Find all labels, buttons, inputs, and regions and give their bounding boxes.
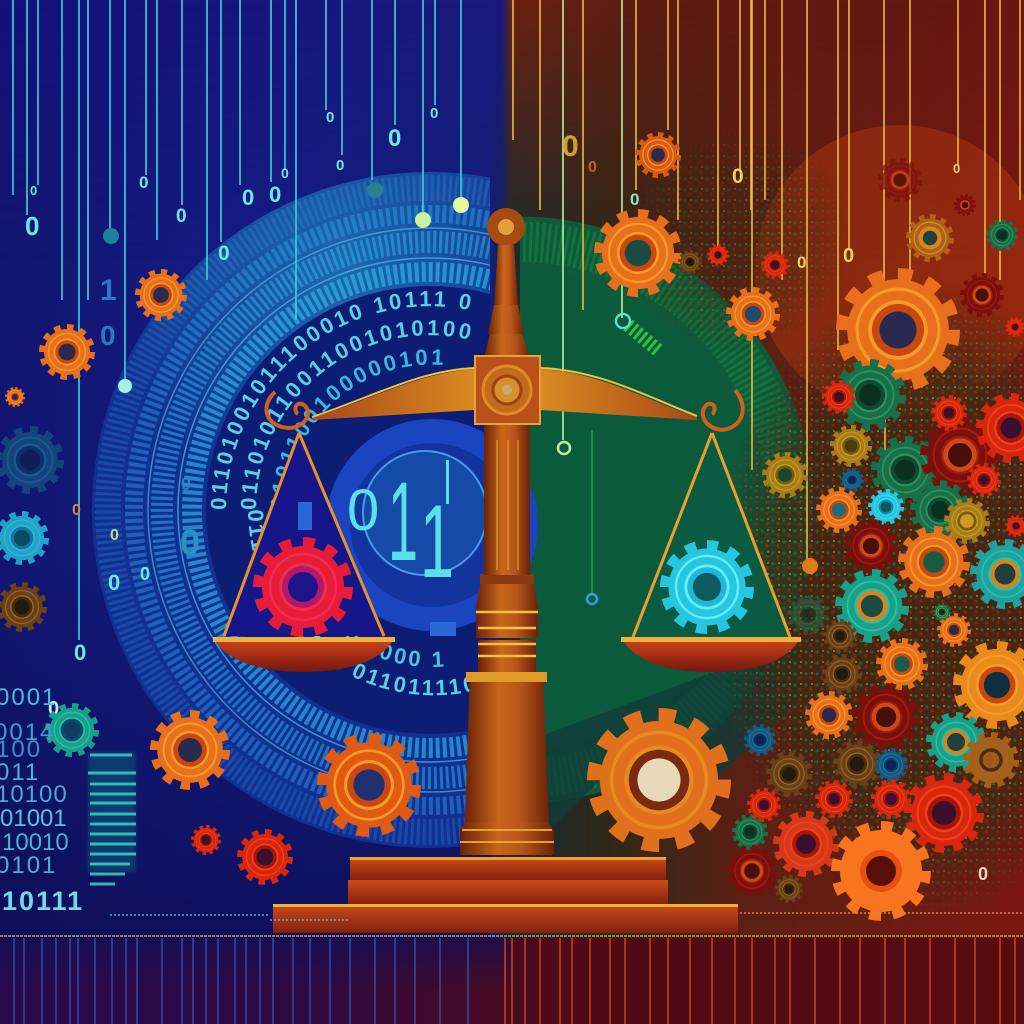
- binary ring text: 10100101100 0000 1: [346, 636, 444, 667]
- falling code lines: blue side: [13, 0, 469, 640]
- scale: left pan: [213, 637, 395, 672]
- falling zeros: blue side: 0: [139, 173, 148, 192]
- falling code lines: orange side: [513, 0, 1020, 604]
- falling zeros: blue side: 0: [140, 564, 150, 584]
- falling zeros: orange side: [562, 130, 988, 884]
- scale: left triangle: [224, 433, 384, 636]
- falling zeros: orange side: 0: [877, 295, 888, 317]
- falling zeros: blue side: 0: [48, 698, 59, 720]
- falling zeros: blue side: 0: [242, 185, 254, 210]
- falling zeros: blue side: 0: [181, 474, 191, 494]
- scale: right triangle: [633, 433, 790, 637]
- binary text block: lower left: 10111: [2, 886, 84, 916]
- falling zeros: blue side: 0: [218, 242, 230, 265]
- falling zeros: blue side: 0: [74, 640, 86, 665]
- falling zeros: blue side: 0: [336, 157, 344, 174]
- speckled texture behind upper right gears: [646, 144, 841, 344]
- hook right: [703, 390, 743, 430]
- falling zeros: orange side: 0: [797, 253, 806, 272]
- gears: upper right: [600, 135, 1024, 495]
- digits in disc: 1: [388, 459, 418, 584]
- scale: beam: [266, 356, 743, 430]
- dome behind right gears: [755, 125, 1024, 415]
- digits in disc: 1: [420, 484, 454, 600]
- gear on left pan: red: [260, 544, 346, 630]
- speckled texture behind right cluster: [722, 290, 1024, 906]
- binary ring text: [210, 291, 470, 696]
- panel: blue binary rings: [92, 172, 490, 848]
- falling zeros: orange side: 0: [588, 159, 597, 176]
- hook left: [266, 392, 308, 428]
- falling zeros: orange side: 0: [978, 864, 988, 884]
- gears: right cluster: [730, 364, 1024, 914]
- falling zeros: orange side: 0: [953, 161, 960, 176]
- binary text block: lower left: 10010: [2, 829, 69, 856]
- digits in disc: [347, 459, 454, 600]
- falling zeros: blue side: [25, 105, 438, 720]
- binary text block: lower left: [0, 684, 84, 916]
- digits in disc: 0: [347, 478, 379, 543]
- falling zeros: blue side: 0: [72, 502, 81, 519]
- falling zeros: blue side: 0: [176, 206, 187, 227]
- teal data stripes: [88, 752, 136, 884]
- panel: green binary rings: [520, 216, 814, 828]
- falling zeros: blue side: 1: [100, 274, 117, 307]
- falling zeros: orange side: 0: [562, 130, 579, 163]
- falling zeros: blue side: 0: [281, 165, 289, 181]
- falling zeros: blue side: 0: [30, 183, 37, 198]
- hub: [475, 356, 540, 424]
- scale: column: [460, 208, 554, 855]
- falling zeros: orange side: 0: [732, 165, 744, 188]
- blue disc with digits: [326, 419, 538, 636]
- falling zeros: blue side: 0: [388, 125, 401, 152]
- large orange gear at base: [597, 718, 721, 842]
- binary ring text: 0101100100000101: [270, 350, 443, 505]
- bottom streaks band: [0, 938, 1024, 1024]
- falling zeros: orange side: 0: [630, 190, 639, 209]
- falling zeros: blue side: 0: [100, 320, 116, 351]
- falling zeros: blue side: 0: [180, 522, 200, 563]
- gear on right pan: cyan: [667, 547, 747, 627]
- falling zeros: blue side: 0: [108, 570, 120, 595]
- falling zeros: blue side: 0: [326, 109, 334, 126]
- scale: base steps: [273, 857, 738, 933]
- binary text block: lower left: 01001: [0, 805, 67, 832]
- falling zeros: orange side: 0: [843, 245, 854, 267]
- falling zeros: blue side: 0: [269, 182, 281, 207]
- falling zeros: blue side: 0: [430, 105, 438, 122]
- baseline rule: [0, 913, 1024, 936]
- gears: left side: [0, 273, 414, 881]
- scale: right pan: [621, 637, 801, 672]
- falling zeros: blue side: 0: [25, 211, 39, 241]
- scale: finial: [484, 208, 530, 358]
- falling zeros: blue side: 0: [110, 527, 119, 544]
